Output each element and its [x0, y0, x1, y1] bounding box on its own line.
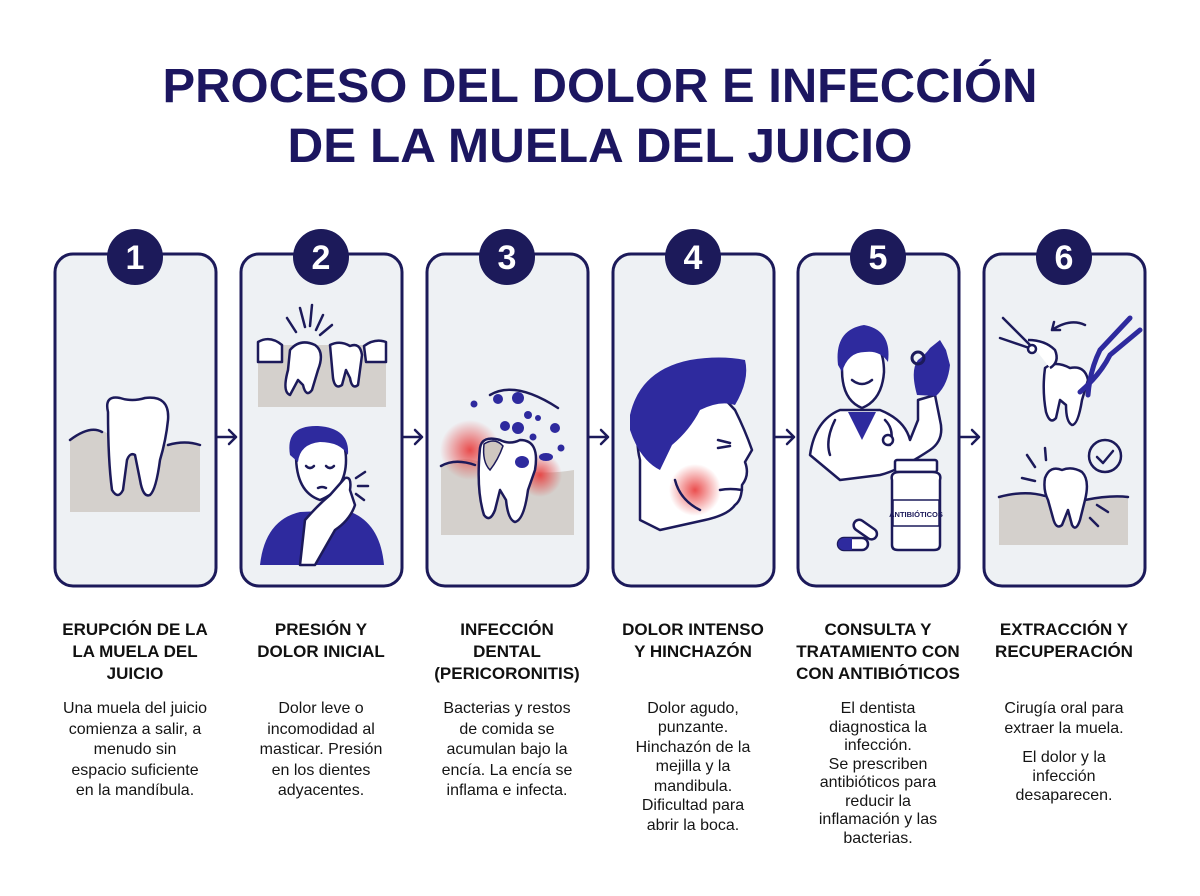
description 3: inflama e infecta.	[447, 782, 567, 799]
description 2: en los dientes	[272, 762, 370, 779]
number 1: 1	[126, 239, 144, 277]
panel 3	[427, 229, 588, 586]
title: DE LA MUELA DEL JUICIO	[288, 120, 912, 173]
description 4: Dificultad para	[642, 797, 744, 814]
panel 6	[984, 229, 1145, 586]
number 3: 3	[498, 239, 516, 277]
description 6: El dolor y la	[1022, 749, 1106, 766]
number 5: 5	[869, 239, 887, 277]
heading 6: RECUPERACIÓN	[995, 642, 1133, 661]
icon: antibiotics bottle	[838, 460, 943, 550]
description 3: de comida se	[459, 721, 555, 738]
panel 2	[241, 229, 402, 586]
number 5	[850, 229, 906, 285]
icon: extraction forceps	[1000, 318, 1140, 425]
panel 4	[613, 229, 774, 586]
number 1	[107, 229, 163, 285]
panel 5	[798, 229, 959, 586]
description 6: extraer la muela.	[1004, 720, 1124, 737]
heading 4: DOLOR INTENSO	[622, 620, 764, 639]
icon: tooth erupting	[70, 398, 200, 512]
description 5: infección.	[844, 737, 912, 754]
description 5	[819, 700, 937, 847]
icon: infected tooth	[440, 390, 574, 535]
title: PROCESO DEL DOLOR E INFECCIÓN	[162, 58, 1038, 113]
description 4: mandibula.	[654, 778, 732, 795]
description 4	[636, 700, 750, 834]
number 6	[1036, 229, 1092, 285]
heading 3: DENTAL	[473, 642, 541, 661]
heading 5	[796, 620, 960, 683]
description 3: encía. La encía se	[442, 762, 572, 779]
icon: swollen face profile	[630, 358, 752, 530]
title	[162, 58, 1038, 173]
description 5: Se prescriben	[829, 756, 927, 773]
heading 2: DOLOR INICIAL	[257, 642, 385, 661]
number 4: 4	[684, 239, 703, 277]
description 1: Una muela del juicio	[63, 700, 207, 717]
description 6: infección	[1032, 768, 1096, 785]
description 3: Bacterias y restos	[443, 700, 571, 717]
heading 2: PRESIÓN Y	[275, 620, 368, 639]
icon: dentist	[810, 325, 950, 480]
description 4: Hinchazón de la	[636, 739, 750, 756]
description 4: abrir la boca.	[647, 817, 739, 834]
heading 5: TRATAMIENTO CON	[796, 642, 960, 661]
heading 1: ERUPCIÓN DE LA	[62, 620, 208, 639]
description 2: Dolor leve o	[278, 700, 364, 717]
heading 3	[434, 620, 580, 683]
description 5: diagnostica la	[829, 719, 927, 736]
description 6: Cirugía oral para	[1004, 700, 1124, 717]
description 4: punzante.	[658, 719, 728, 736]
description 5: El dentista	[841, 700, 915, 717]
heading 1: JUICIO	[107, 664, 163, 683]
description 4: mejilla y la	[656, 758, 730, 775]
number 6: 6	[1055, 239, 1073, 277]
heading 1: LA MUELA DEL	[72, 642, 198, 661]
heading 5: CONSULTA Y	[824, 620, 932, 639]
description 2: incomodidad al	[267, 721, 375, 738]
description 3	[442, 700, 572, 799]
icon: antibiotics bottle: ANTIBIÓTICOS	[889, 510, 943, 519]
number 3	[479, 229, 535, 285]
description 1: menudo sin	[94, 741, 176, 758]
heading 6	[995, 620, 1133, 661]
description 5: bacterias.	[843, 830, 913, 847]
description 1: en la mandíbula.	[76, 782, 194, 799]
icon: impacted teeth	[258, 305, 386, 407]
arrows	[217, 430, 979, 444]
description 4: Dolor agudo,	[647, 700, 739, 717]
description 1: espacio suficiente	[71, 762, 199, 779]
heading 1	[62, 620, 208, 683]
heading 3: (PERICORONITIS)	[434, 664, 580, 683]
description 5: reducir la	[845, 793, 911, 810]
heading 2	[257, 620, 385, 661]
description 3: acumulan bajo la	[447, 741, 568, 758]
heading 3: INFECCIÓN	[460, 620, 554, 639]
number 4	[665, 229, 721, 285]
description 1: comienza a salir, a	[69, 721, 201, 738]
description 6: desaparecen.	[1016, 787, 1112, 804]
number 2	[293, 229, 349, 285]
icon: healed tooth with check	[999, 440, 1128, 545]
heading 6: EXTRACCIÓN Y	[1000, 620, 1129, 639]
heading 5: CON ANTIBIÓTICOS	[796, 664, 960, 683]
heading 4: Y HINCHAZÓN	[634, 642, 752, 661]
description 6	[1004, 700, 1124, 804]
description 5: inflamación y las	[819, 811, 937, 828]
number 2: 2	[312, 239, 330, 277]
description 2	[260, 700, 382, 799]
description 1	[63, 700, 207, 799]
icon: man in pain	[260, 426, 384, 565]
panel 1	[55, 229, 216, 586]
description 5: antibióticos para	[820, 774, 936, 791]
description 2: adyacentes.	[278, 782, 364, 799]
heading 4	[622, 620, 764, 661]
description 2: masticar. Presión	[260, 741, 382, 758]
